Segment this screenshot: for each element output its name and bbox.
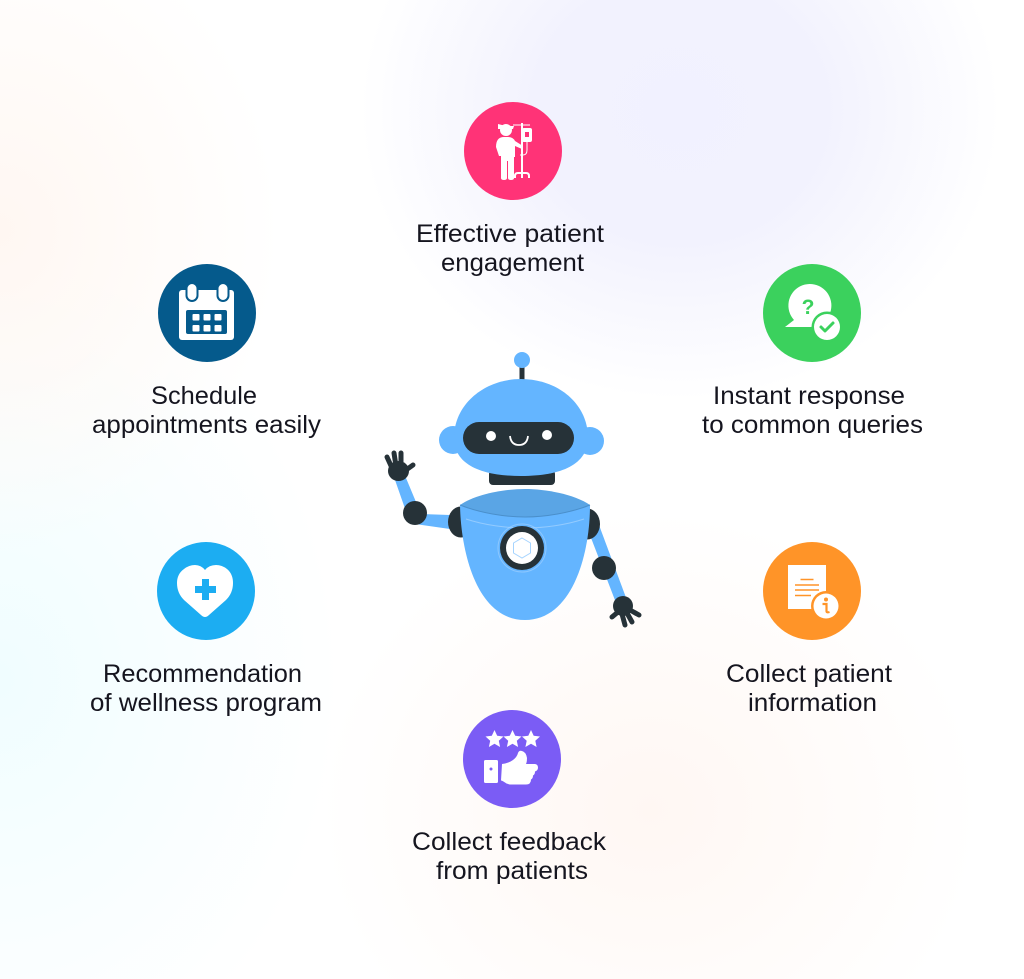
item: schedule appointments bbox=[92, 264, 322, 439]
icon: document with info badge bbox=[763, 542, 861, 640]
heading: recommendation of wellness program bbox=[90, 660, 322, 717]
heading: schedule appointments easily: Schedule bbox=[151, 382, 257, 410]
heading: schedule appointments easily bbox=[92, 382, 322, 439]
heading: effective patient engagement bbox=[416, 220, 604, 277]
icon: heart with cross bbox=[157, 542, 255, 640]
icon: patient with IV drip bbox=[464, 102, 562, 200]
heading: effective patient engagement: engagement bbox=[441, 249, 584, 277]
heading: collect feedback from patients: from patients bbox=[436, 857, 588, 885]
heading: recommendation of wellness program: of wellness program bbox=[90, 689, 322, 717]
robot body bbox=[460, 489, 590, 620]
heading: instant response to common queries: to common queries bbox=[702, 411, 923, 439]
heading: instant response to common queries bbox=[702, 382, 923, 439]
icon: stars and thumbs up bbox=[463, 710, 561, 808]
illustration: waving robot bbox=[387, 352, 639, 625]
item: collect feedback bbox=[412, 710, 607, 885]
robot right arm bbox=[574, 508, 639, 625]
robot antenna bbox=[514, 352, 530, 381]
heading: collect patient information bbox=[726, 660, 892, 717]
item: recommendation of wellness program bbox=[90, 542, 322, 717]
heading: collect patient information: Collect patient bbox=[726, 660, 892, 688]
heading: collect feedback from patients bbox=[412, 828, 607, 885]
heading: recommendation of wellness program: Recommendation bbox=[103, 660, 302, 688]
icon: question bubble with check bbox=[763, 264, 861, 362]
icon: question bubble with check: ? bbox=[802, 296, 814, 319]
heading: collect feedback from patients: Collect feedback bbox=[412, 828, 607, 856]
robot ears bbox=[439, 426, 604, 455]
robot visor bbox=[463, 422, 574, 454]
heading: schedule appointments easily: appointments easily bbox=[92, 411, 322, 439]
heading: collect patient information: information bbox=[748, 689, 877, 717]
robot neck bbox=[489, 470, 555, 485]
item: collect patient information bbox=[726, 542, 892, 717]
icon: calendar bbox=[158, 264, 256, 362]
heading: effective patient engagement: Effective patient bbox=[416, 220, 604, 248]
item: effective patient engagement bbox=[416, 102, 604, 277]
robot left arm bbox=[387, 453, 474, 538]
item: instant response bbox=[702, 264, 923, 439]
heading: instant response to common queries: Instant response bbox=[713, 382, 905, 410]
robot head bbox=[454, 379, 588, 476]
